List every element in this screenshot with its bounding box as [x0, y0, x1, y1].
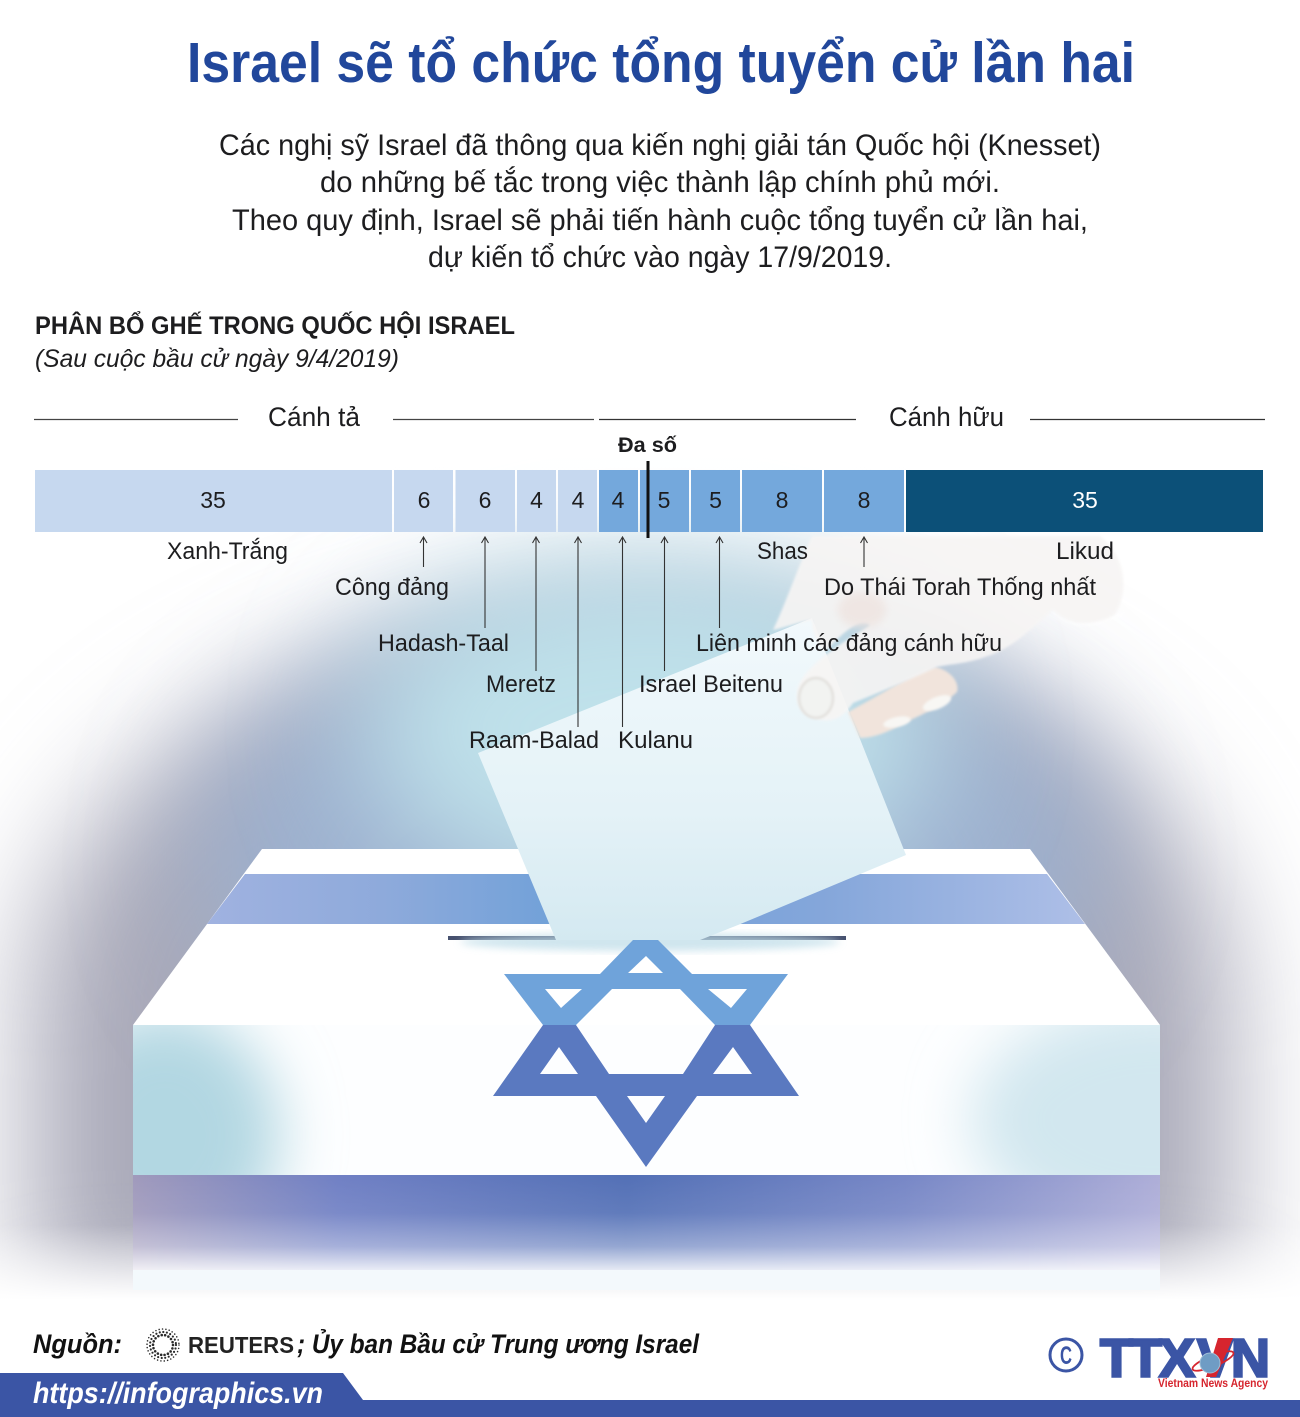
party arrows — [420, 537, 868, 727]
copyright mark — [1050, 1339, 1082, 1371]
chart subtitle: (Sau cuộc bầu cử ngày 9/4/2019) — [35, 345, 399, 373]
wordmark: TTXVN — [1100, 1328, 1270, 1388]
seat bar chart: 5 — [658, 487, 670, 513]
intro text — [219, 129, 1101, 274]
agency tagline: Vietnam News Agency — [1158, 1378, 1269, 1390]
icon: Reuters dots — [147, 1329, 179, 1361]
party labels: Likud — [1056, 538, 1114, 565]
party labels: Shas — [757, 538, 808, 565]
majority line — [646, 461, 650, 538]
seat bar chart: 6 — [418, 487, 430, 513]
seat bar chart: 5 — [709, 487, 722, 513]
seat bar chart: 4 — [572, 487, 585, 513]
chart heading: PHÂN BỔ GHẾ TRONG QUỐC HỘI ISRAEL — [35, 310, 515, 340]
seat bar chart: 4 — [530, 487, 543, 513]
intro text: do những bế tắc trong việc thành lập chính phủ mới. — [320, 166, 1000, 199]
thumb nail — [799, 678, 833, 718]
box front face — [133, 1025, 1160, 1175]
lower fingers — [848, 667, 958, 738]
source line: Nguồn: — [33, 1329, 122, 1359]
party labels: Kulanu — [618, 727, 693, 754]
logo: TTXVN — [1050, 1328, 1270, 1390]
back of hand — [773, 536, 1123, 720]
right wing header: Cánh hữu — [889, 402, 1004, 432]
flag stripe on box top — [207, 874, 1085, 924]
ballot box — [133, 849, 1160, 1284]
red V arm and globe — [1191, 1338, 1235, 1377]
icon: star of David — [493, 940, 799, 1167]
majority label: Đa số — [618, 434, 677, 457]
left wing header: Cánh tả — [268, 402, 361, 432]
seat bar chart: 35 — [200, 487, 226, 513]
party labels: Meretz — [486, 671, 556, 698]
seat bar chart: 4 — [612, 487, 625, 513]
seat bar chart: 8 — [776, 487, 788, 513]
source line: ; Ủy ban Bầu cử Trung ương Israel — [297, 1327, 699, 1359]
hand holding ballot — [773, 536, 1125, 738]
intro text: dự kiến tổ chức vào ngày 17/9/2019. — [428, 241, 892, 274]
intro text: Các nghị sỹ Israel đã thông qua kiến nghị giải tán Quốc hội (Knesset) — [219, 129, 1101, 162]
party labels: Israel Beitenu — [639, 671, 783, 698]
intro text: Theo quy định, Israel sẽ phải tiến hành cuộc tổng tuyển cử lần hai, — [232, 204, 1088, 237]
paper shadow — [460, 933, 840, 951]
seat bar chart: 8 — [858, 487, 870, 513]
party labels: Hadash-Taal — [378, 630, 509, 657]
party labels — [167, 538, 1114, 754]
ballot paper — [478, 618, 906, 940]
ballot slot — [448, 936, 846, 940]
seat bar chart — [35, 470, 1263, 532]
seat bar chart: 6 — [479, 487, 491, 513]
copyright mark: C — [1060, 1342, 1072, 1370]
title: Israel sẽ tổ chức tổng tuyển cử lần hai — [187, 31, 1135, 95]
footer band — [0, 1373, 1300, 1417]
box base strip — [133, 1270, 1160, 1290]
index shading — [838, 592, 886, 628]
party labels: Raam-Balad — [469, 727, 599, 754]
wrist curl — [1053, 612, 1125, 625]
party labels: Liên minh các đảng cánh hữu — [696, 630, 1002, 657]
party labels: Xanh-Trắng — [167, 538, 288, 565]
party labels: Công đảng — [335, 574, 449, 601]
website url: https://infographics.vn — [33, 1377, 323, 1410]
source line: REUTERS — [188, 1332, 294, 1358]
fingernails — [882, 692, 953, 730]
source line — [33, 1327, 699, 1361]
box lower band — [133, 1175, 1160, 1270]
party labels: Do Thái Torah Thống nhất — [824, 574, 1096, 601]
seat bar chart: 35 — [1072, 487, 1098, 513]
box top — [133, 849, 1160, 1025]
